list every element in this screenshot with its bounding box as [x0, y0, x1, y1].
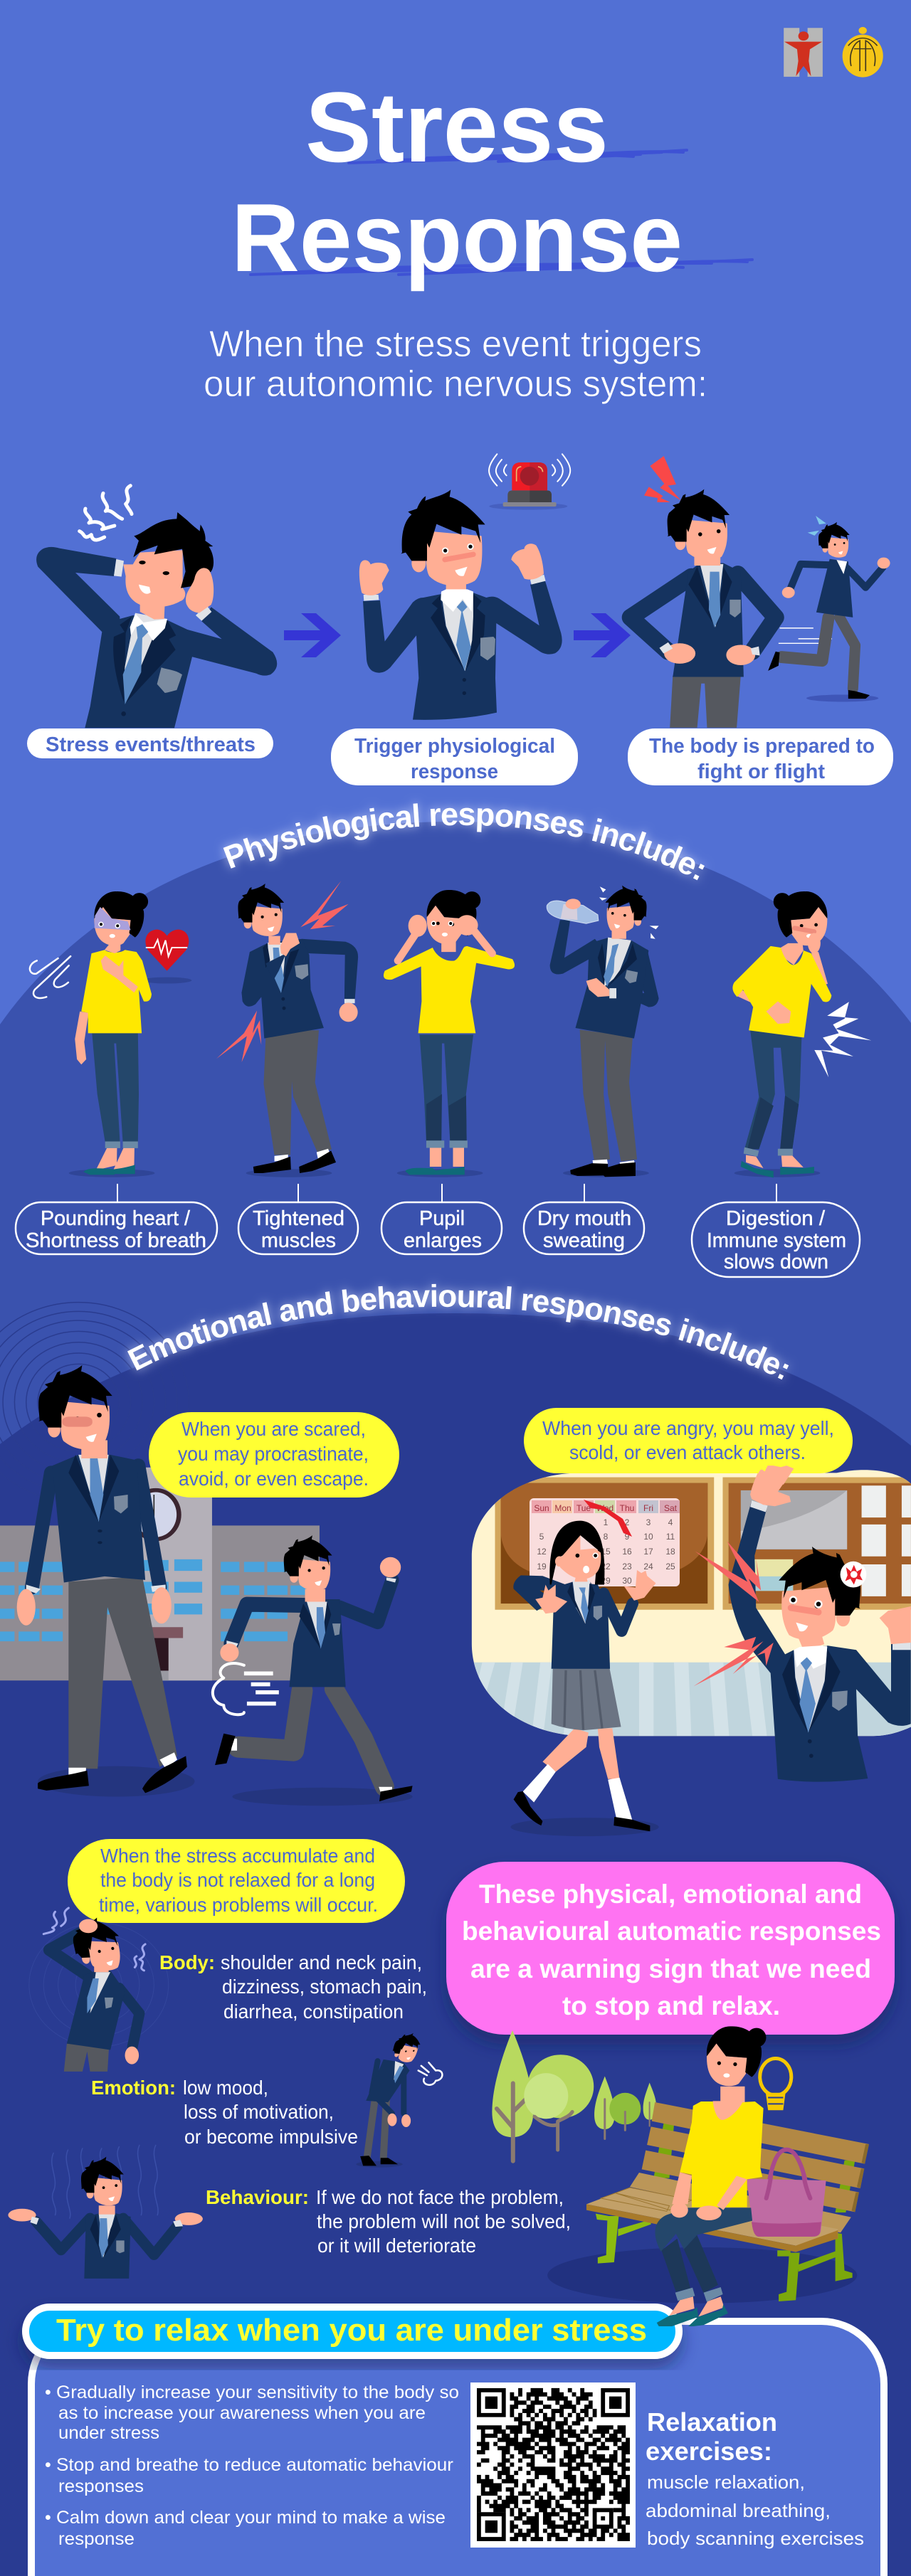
- puff: [418, 2062, 442, 2085]
- calendar: 5: [539, 1532, 544, 1542]
- relaxation exercises: body scanning exercises: [647, 2528, 864, 2549]
- calendar: Fri: [643, 1503, 653, 1513]
- figure: scared tall boy: [17, 1365, 194, 1797]
- calendar: Mon: [554, 1503, 572, 1513]
- calendar: 4: [668, 1517, 673, 1527]
- text: behaviour symptoms: Behaviour:: [206, 2186, 309, 2208]
- legs: [669, 2296, 724, 2317]
- calendar: 22: [601, 1562, 611, 1571]
- calendar: 18: [665, 1547, 675, 1557]
- bubble: scared: you may procrastinate,: [178, 1443, 369, 1465]
- yellow top: [680, 2101, 764, 2207]
- callout: warning sign: These physical, emotional and: [479, 1880, 862, 1909]
- calendar: Sat: [664, 1503, 678, 1513]
- bubble: accumulate: time, various problems will occur.: [99, 1894, 378, 1916]
- panel header: Try to relax when you are under stress: [56, 2313, 647, 2348]
- label: pounding heart: Pounding heart /: [41, 1207, 190, 1230]
- squiggles: [43, 1908, 145, 1971]
- bullet list: under stress: [58, 2423, 159, 2443]
- figure: stress events boy: [36, 486, 277, 728]
- label: digestion: [692, 1202, 860, 1277]
- label: pounding heart: [16, 1202, 217, 1254]
- calendar: Wed: [596, 1503, 614, 1513]
- text: behaviour symptoms: the problem will not be solved,: [317, 2210, 571, 2232]
- figure: prepared boy: [631, 489, 776, 728]
- bubble: scared: avoid, or even escape.: [179, 1468, 369, 1490]
- wavy lines: [52, 2145, 158, 2218]
- pill: fight or flight: fight or flight: [697, 760, 825, 783]
- arrow 1: [284, 613, 341, 657]
- label: digestion: slows down: [724, 1251, 828, 1273]
- notice board left: [495, 1478, 714, 1610]
- bullet list: response: [58, 2529, 135, 2549]
- calendar: 10: [643, 1532, 653, 1542]
- calendar: 12: [537, 1547, 547, 1557]
- label: dry mouth: sweating: [543, 1229, 625, 1252]
- label: pupil enlarges: enlarges: [404, 1229, 482, 1252]
- text: body symptoms: dizziness, stomach pain,: [222, 1976, 427, 1998]
- figure: body symptoms boy: [29, 1908, 169, 2072]
- bullet list: Gradually increase your sensitivity to the body so: [56, 2382, 459, 2402]
- heading: emotional and behavioural responses: Emotional and behavioural responses include:: [122, 1281, 791, 1383]
- calendar: Thu: [620, 1503, 634, 1513]
- concentric rings: [0, 1303, 189, 1502]
- text: emotion symptoms: low mood,: [183, 2077, 268, 2099]
- label: dry mouth: Dry mouth: [537, 1207, 631, 1230]
- bubble: accumulate: When the stress accumulate and: [100, 1845, 375, 1867]
- calendar: 16: [622, 1547, 632, 1557]
- title: [231, 71, 752, 292]
- arrow 2: [574, 613, 631, 657]
- pill: stress events: Stress events/threats: [46, 733, 256, 756]
- screen: [741, 1490, 847, 1549]
- panel card: [31, 2321, 884, 2576]
- figure: girl digestion: [732, 891, 871, 1178]
- calendar: [530, 1498, 680, 1586]
- bubble: scared: [149, 1412, 399, 1498]
- red burst on calendar: [584, 1500, 632, 1537]
- anger mark: [841, 1562, 866, 1588]
- pill: fight or flight: The body is prepared to: [649, 735, 875, 758]
- red lightning: [695, 1541, 761, 1602]
- calendar: 30: [622, 1576, 632, 1586]
- figure: trigger boy with alarm: [359, 454, 570, 720]
- text: body symptoms: diarrhea, constipation: [223, 2000, 404, 2023]
- pill: trigger response: Trigger physiological: [354, 735, 555, 758]
- subtitle: [204, 324, 707, 405]
- sweat drops: [808, 516, 826, 536]
- calendar: 15: [601, 1547, 611, 1557]
- heading: physiological responses: Physiological responses include:: [219, 800, 707, 884]
- bubble: angry: scold, or even attack others.: [569, 1441, 806, 1463]
- title: Stress: [305, 71, 609, 183]
- connectors: [117, 1184, 776, 1202]
- squiggles: [80, 486, 132, 540]
- background: emotional arch: [0, 1313, 911, 2576]
- pill: trigger response: response: [411, 760, 498, 783]
- background: physiological arch: [0, 822, 911, 2576]
- figure: boy dry mouth drinking: [547, 886, 659, 1177]
- logos: [784, 27, 883, 78]
- windows: [0, 1559, 308, 1641]
- panel: try to relax: [26, 2307, 884, 2576]
- puff: [213, 1663, 279, 1714]
- calendar: Tue: [576, 1503, 591, 1513]
- label: pupil enlarges: [381, 1202, 502, 1254]
- water bottle: [547, 901, 599, 923]
- bullet list: as to increase your awareness when you are: [58, 2403, 426, 2423]
- bench and lower body: [547, 2101, 869, 2326]
- label: tightened muscles: Tightened: [253, 1207, 344, 1230]
- calendar: 11: [666, 1532, 675, 1542]
- bullet list: •: [45, 2382, 51, 2402]
- calendar: 23: [622, 1562, 632, 1571]
- subtitle: When the stress event triggers: [209, 324, 702, 365]
- bubble: scared: When you are scared,: [181, 1418, 366, 1440]
- bullet list: [45, 2382, 459, 2549]
- text: emotion symptoms: [91, 2077, 358, 2148]
- QR code: [470, 2382, 636, 2548]
- text: behaviour symptoms: [206, 2186, 571, 2257]
- label: pupil enlarges: Pupil: [419, 1207, 465, 1230]
- figure: angry boy: [694, 1465, 911, 1782]
- text: emotion symptoms: loss of motivation,: [184, 2101, 334, 2123]
- trees: [492, 2030, 656, 2161]
- calendar: 19: [537, 1562, 547, 1571]
- speed lines: [779, 628, 832, 643]
- figure: shrugging boy: [8, 2145, 203, 2279]
- panel header: [26, 2307, 679, 2355]
- bullet list: Calm down and clear your mind to make a wise: [56, 2508, 446, 2528]
- notice board right: [722, 1478, 911, 1610]
- raised fingers over bubble: [757, 1465, 794, 1485]
- logo: yellow hands: [843, 27, 883, 78]
- text: body symptoms: shoulder and neck pain,: [221, 1951, 422, 1973]
- relaxation exercises: Relaxation: [647, 2407, 777, 2437]
- bubble: angry: [524, 1408, 853, 1473]
- text: emotion symptoms: or become impulsive: [184, 2126, 358, 2148]
- figure: girl pounding heart: [30, 891, 191, 1177]
- figure: woman on bench: [547, 2026, 869, 2326]
- figure: bent over boy: [356, 2032, 442, 2168]
- text: emotion symptoms: Emotion:: [91, 2077, 176, 2099]
- callout: warning sign: behavioural automatic responses: [462, 1917, 881, 1946]
- head and bulb: [707, 2026, 791, 2110]
- classroom scene: [465, 1470, 911, 1739]
- label: digestion: Immune system: [707, 1229, 846, 1252]
- bullet list: Stop and breathe to reduce automatic behaviour: [56, 2455, 453, 2475]
- label: digestion: Digestion /: [726, 1207, 825, 1230]
- school building: [0, 1468, 320, 1680]
- bubble: accumulate: [68, 1839, 405, 1923]
- callout: warning sign: [446, 1862, 895, 2035]
- pill: fight or flight: [628, 728, 893, 785]
- calendar: 9: [625, 1532, 630, 1542]
- relaxation exercises: exercises:: [646, 2437, 772, 2466]
- white lightning: [814, 1002, 871, 1077]
- bullet list: •: [45, 2455, 51, 2475]
- bubble: accumulate: the body is not relaxed for a long: [100, 1869, 375, 1891]
- door: [142, 1627, 183, 1680]
- alarm: [489, 454, 570, 510]
- title brush strokes: [251, 150, 752, 275]
- bench legs: [596, 2214, 651, 2264]
- uprights: [653, 2124, 855, 2212]
- figure: girl pupil enlarges: [384, 890, 515, 1177]
- label: pounding heart: Shortness of breath: [26, 1229, 206, 1252]
- clock: [130, 1488, 181, 1541]
- callout: warning sign: to stop and relax.: [562, 1991, 780, 2020]
- red lightning: [644, 456, 681, 502]
- calendar: 17: [643, 1547, 653, 1557]
- breath lines: [30, 956, 70, 998]
- calendar: 2: [625, 1517, 630, 1527]
- text: behaviour symptoms: or it will deteriorate: [317, 2235, 476, 2257]
- relaxation exercises: muscle relaxation,: [647, 2471, 805, 2493]
- bubble: angry: When you are angry, you may yell,: [542, 1417, 834, 1439]
- light bulb: [760, 2059, 791, 2110]
- text: behaviour symptoms: If we do not face the problem,: [316, 2186, 564, 2208]
- label: tightened muscles: [238, 1202, 358, 1254]
- subtitle: our autonomic nervous system:: [204, 364, 707, 405]
- back slats: [652, 2102, 869, 2164]
- bullet list: responses: [58, 2476, 144, 2496]
- text: body symptoms: [159, 1951, 427, 2023]
- logo: red figure on grey: [784, 28, 823, 77]
- figure: boy tightened muscles: [216, 881, 358, 1177]
- calendar: 29: [601, 1576, 611, 1586]
- figure: running boy escaping: [213, 1535, 413, 1806]
- relaxation exercises: abdominal breathing,: [646, 2500, 831, 2521]
- callout: warning sign: are a warning sign that we need: [470, 1954, 871, 1983]
- seat: [630, 2173, 851, 2232]
- bullet list: •: [45, 2508, 51, 2528]
- figure: running boy: [768, 516, 890, 701]
- label: tightened muscles: muscles: [261, 1229, 336, 1252]
- figure: frightened schoolgirl: [511, 1521, 659, 1836]
- relaxation exercises: [646, 2407, 864, 2549]
- pill: stress events: [27, 728, 273, 758]
- title: Response: [231, 184, 683, 292]
- calendar: 24: [643, 1562, 653, 1571]
- red lightning: [300, 881, 349, 929]
- label: dry mouth: [524, 1202, 644, 1254]
- text: body symptoms: Body:: [159, 1951, 215, 1973]
- pill: trigger response: [331, 728, 578, 785]
- sweat drops: [599, 886, 659, 939]
- heart: [142, 930, 191, 984]
- posters: [862, 1485, 911, 1596]
- calendar: 25: [665, 1562, 675, 1571]
- calendar: 8: [604, 1532, 609, 1542]
- bag: [747, 2150, 826, 2237]
- symptom labels: [16, 1184, 860, 1277]
- calendar: 3: [646, 1517, 651, 1527]
- calendar: 1: [604, 1517, 609, 1527]
- calendar: Sun: [534, 1503, 549, 1513]
